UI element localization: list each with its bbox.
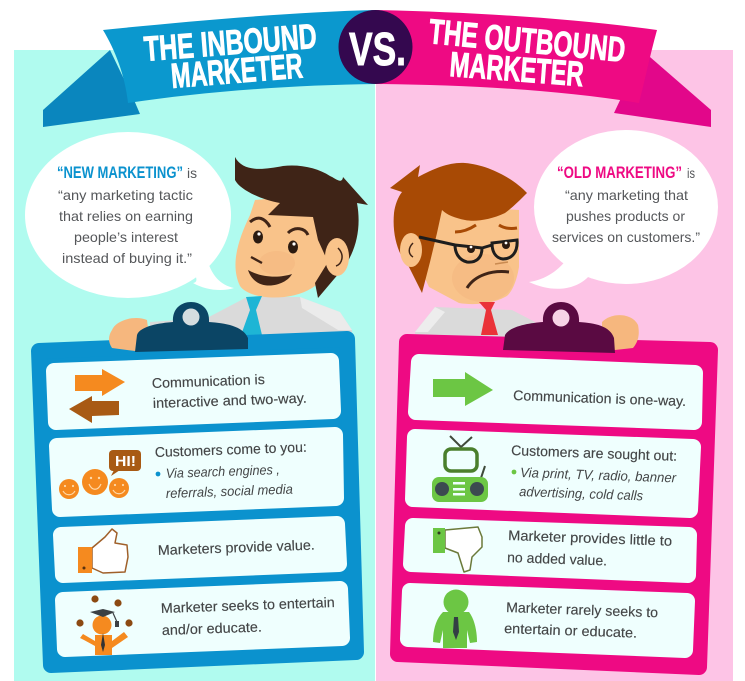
row 3: little added value: [411, 526, 689, 575]
ribbon: inbound banner: [43, 10, 376, 127]
row 2: customers come to you: [57, 435, 336, 509]
icon: smiley faces: [59, 450, 141, 499]
text: marketer seeks to entertain: Marketer seeks to entertain: [161, 594, 335, 616]
speech bubble: new marketing: “NEW MARKETING”: [57, 164, 183, 182]
text: marketer provides little: no added value.: [507, 549, 607, 568]
row 2: customers are sought out: [413, 436, 693, 510]
panel: inbound background: [14, 50, 375, 681]
text: customers come to you: [155, 439, 307, 501]
text: marketer rarely seeks: entertain or educate.: [504, 620, 637, 641]
speech bubble: new marketing: that relies on earning: [59, 208, 193, 224]
title: the inbound marketer: [143, 17, 318, 96]
icon: tv and radio: [432, 436, 488, 502]
row 1: one-way communication: [416, 362, 695, 422]
clip: inbound: [135, 302, 248, 352]
character: inbound marketer: [150, 157, 368, 345]
icon: thumbs up: [78, 529, 128, 573]
title: the outbound marketer: MARKETER: [448, 45, 585, 94]
row 3: marketers provide value: [61, 524, 339, 575]
speech bubble: new marketing: instead of buying it.”: [62, 250, 192, 266]
icon: smiley faces: HI!: [115, 453, 136, 470]
text: marketers provide value: Marketers provide value.: [158, 537, 315, 558]
text: marketer seeks to entertain: and/or educate.: [162, 619, 262, 638]
icon: two-way arrows: [69, 369, 125, 423]
icon: one-way arrow: [433, 372, 493, 406]
title: the outbound marketer: [427, 12, 627, 94]
panel: outbound background: [376, 50, 733, 681]
icon: thumbs down: [433, 527, 482, 572]
text: communication: Communication is: [152, 371, 265, 391]
text: communication: [152, 371, 307, 411]
text: customers are sought out: advertising, cold calls: [519, 484, 644, 503]
hand: outbound: [602, 315, 639, 350]
speech bubble: new marketing: “any marketing tactic: [58, 187, 193, 203]
icon: juggling graduate: [76, 595, 133, 655]
text: communication is one-way: Communication is one-way.: [513, 387, 686, 409]
speech bubble: old marketing: pushes products or: [566, 208, 685, 224]
text: marketer seeks to entertain: [161, 594, 335, 638]
speech bubble: old marketing: “OLD MARKETING”: [557, 164, 682, 182]
text: customers are sought out: Customers are sought out:: [511, 442, 677, 464]
text: marketer rarely seeks: Marketer rarely seeks to: [506, 599, 659, 620]
clipboard: inbound: [39, 302, 356, 665]
ribbon: outbound banner: [376, 10, 711, 127]
hand: inbound: [109, 318, 150, 351]
text: customers are sought out: Via print, TV, radio, banner: [520, 465, 677, 485]
text: marketer rarely seeks: [504, 599, 659, 641]
row 4: entertain or educate: [63, 589, 342, 655]
text: marketer provides little: [507, 527, 673, 568]
speech bubble: old marketing: is: [687, 165, 695, 181]
speech bubble: new marketing: [25, 132, 234, 298]
clip: outbound: [503, 302, 615, 353]
row 1: two-way communication: [54, 361, 333, 423]
title: the inbound marketer: MARKETER: [170, 47, 304, 96]
text: customers come to you: Customers come to you:: [155, 439, 307, 460]
clipboard: outbound: [398, 302, 710, 667]
speech bubble: old marketing: “any marketing that: [565, 187, 688, 203]
speech bubble: new marketing: is: [187, 165, 197, 181]
text: communication: interactive and two-way.: [153, 390, 307, 411]
text: marketer provides little: Marketer provides little to: [508, 527, 673, 549]
text: customers come to you: Via search engines ,: [166, 462, 280, 481]
character: outbound marketer: [390, 163, 535, 340]
speech bubble: old marketing: [529, 130, 718, 289]
title: the inbound marketer: THE INBOUND: [143, 17, 318, 69]
speech bubble: old marketing: services on customers.”: [552, 229, 700, 245]
badge: vs: VS.: [349, 23, 406, 75]
title: the outbound marketer: THE OUTBOUND: [427, 12, 627, 70]
text: customers are sought out: [511, 442, 677, 503]
row 4: rarely entertains: [408, 590, 687, 650]
icon: slumped person: [433, 590, 477, 648]
speech bubble: new marketing: people’s interest: [74, 229, 178, 245]
badge: vs: [338, 10, 412, 84]
text: customers come to you: referrals, social media: [166, 482, 294, 501]
